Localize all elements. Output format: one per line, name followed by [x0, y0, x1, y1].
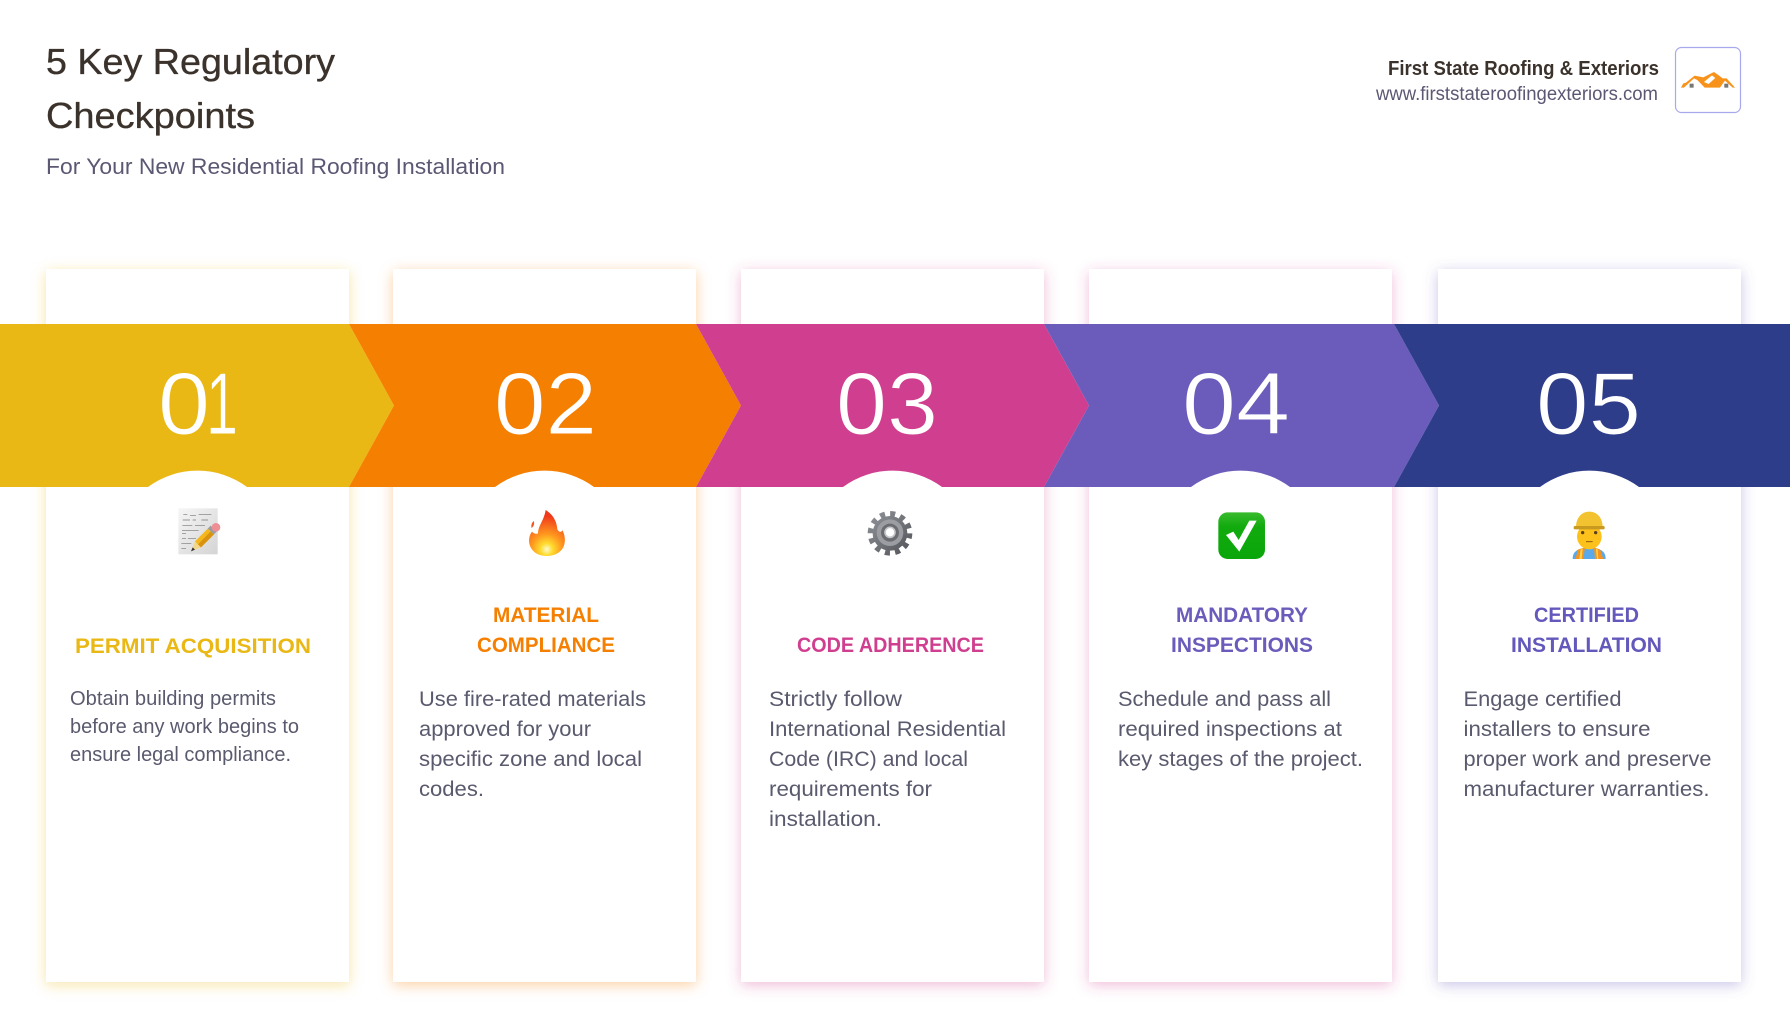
description	[419, 687, 646, 801]
arrow 01	[0, 324, 394, 487]
heading	[1511, 603, 1662, 657]
description	[1118, 687, 1363, 771]
description: manufacturer warranties.	[1464, 777, 1710, 801]
card background	[1438, 269, 1741, 982]
panel: mandatory inspections	[1089, 269, 1392, 982]
arrow band	[0, 324, 1790, 487]
heading: INSPECTIONS	[1171, 633, 1313, 657]
arrow 04	[1044, 324, 1439, 487]
description: before any work begins to	[70, 716, 299, 738]
title	[46, 41, 335, 136]
arrow 05	[1394, 324, 1790, 487]
description: ensure legal compliance.	[70, 744, 291, 766]
description: Engage certified	[1464, 687, 1622, 711]
description: Strictly follow	[769, 687, 902, 711]
icon: check mark	[1218, 512, 1265, 559]
icon: fire	[529, 510, 565, 556]
description	[1464, 687, 1712, 801]
heading: COMPLIANCE	[477, 633, 615, 657]
company name: First State Roofing & Exteriors	[1388, 58, 1659, 80]
panel: permit acquisition	[46, 269, 349, 982]
arrow 03: 03	[836, 354, 938, 453]
description: specific zone and local	[419, 747, 642, 771]
card background	[741, 269, 1044, 982]
description	[70, 688, 299, 766]
title: 5 Key Regulatory	[46, 41, 335, 82]
description: requirements for	[769, 777, 932, 801]
heading: MANDATORY	[1176, 603, 1308, 627]
icon: construction worker	[1573, 512, 1606, 559]
icon: memo and pencil	[178, 508, 220, 554]
description: International Residential	[769, 717, 1006, 741]
card background	[1089, 269, 1392, 982]
description: codes.	[419, 777, 484, 801]
card background	[393, 269, 696, 982]
description: proper work and preserve	[1464, 747, 1712, 771]
arrow 05: 05	[1536, 354, 1641, 453]
arrow 02: 02	[494, 354, 597, 453]
heading: PERMIT ACQUISITION	[75, 634, 311, 658]
description: Code (IRC) and local	[769, 747, 968, 771]
website: www.firststateroofingexteriors.com	[1375, 84, 1658, 105]
description: approved for your	[419, 717, 591, 741]
heading: INSTALLATION	[1511, 633, 1662, 657]
description: Use fire-rated materials	[419, 687, 646, 711]
description: required inspections at	[1118, 717, 1342, 741]
arrow 01: 0	[158, 354, 210, 453]
panel: certified installation	[1438, 269, 1741, 982]
description: key stages of the project.	[1118, 747, 1363, 771]
arrow 01: 1	[206, 354, 238, 453]
description: Schedule and pass all	[1118, 687, 1331, 711]
subtitle: For Your New Residential Roofing Installation	[46, 154, 505, 179]
panel: material compliance	[393, 269, 696, 982]
description: installers to ensure	[1464, 717, 1650, 741]
brand block	[1375, 48, 1740, 112]
description: Obtain building permits	[70, 688, 276, 710]
arrow 03	[696, 324, 1089, 487]
arrow 04: 04	[1182, 354, 1290, 453]
title: Checkpoints	[46, 95, 255, 136]
arrow 02	[349, 324, 741, 487]
heading	[477, 603, 615, 657]
heading: MATERIAL	[493, 603, 599, 627]
description: installation.	[769, 807, 882, 831]
logo	[1676, 48, 1740, 112]
panel: code adherence	[741, 269, 1044, 982]
heading: CODE ADHERENCE	[797, 633, 984, 657]
card background	[46, 269, 349, 982]
icon: gear	[871, 514, 909, 553]
description	[769, 687, 1006, 831]
heading	[1171, 603, 1313, 657]
heading: CERTIFIED	[1534, 603, 1639, 627]
